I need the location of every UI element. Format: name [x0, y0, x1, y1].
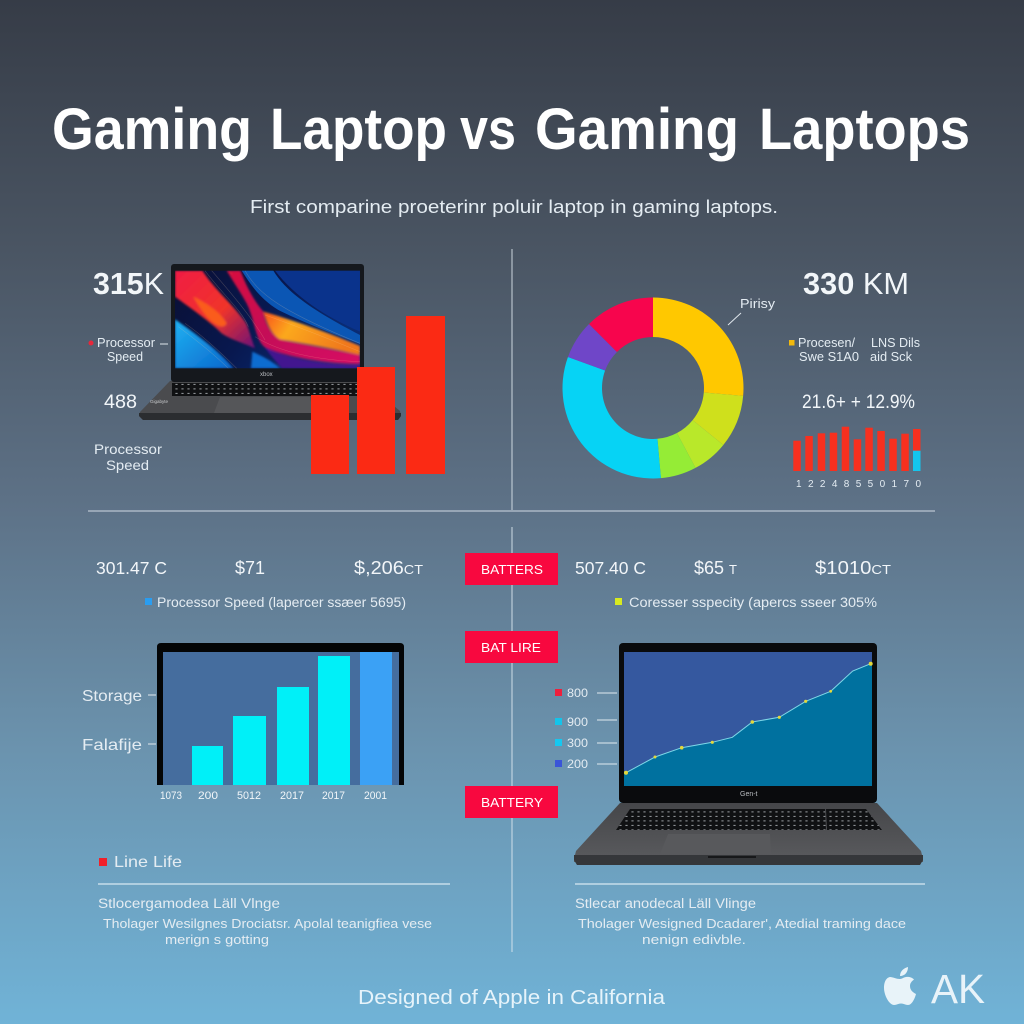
mini bar axis labels: 1 2 2 4 8 5 5 0 1 7 0: [796, 479, 921, 490]
label: processor speed: [94, 441, 162, 473]
stat row: $1010 CT: [815, 558, 891, 578]
title: Gaming: [52, 97, 252, 162]
description text: Tholager Wesilgnes Drociatsr. Apolal teanigfiea vese: [103, 917, 432, 931]
laptop illustration: Gigabyte: [150, 399, 169, 404]
chart axis labels: storage and falafije: Falafije: [82, 737, 142, 754]
legend: line life: Line Life: [114, 854, 182, 871]
panel: top right donut stats: [563, 266, 921, 490]
chart x axis years: 2001: [364, 790, 387, 802]
chart y axis legend: 900: [567, 717, 588, 729]
description text: Tholager Wesigned Dcadarer', Atedial traming dace: [578, 917, 906, 931]
laptop screen bar chart: [157, 643, 404, 785]
chart y axis legend: 300: [567, 738, 588, 750]
upper right blue region: [275, 271, 360, 332]
legend text: [789, 336, 920, 364]
description text: Stlecar anodecal Läll Vlinge: [575, 896, 756, 911]
laptop with area chart: Gen-t: [740, 791, 758, 798]
donut chart: [563, 298, 743, 478]
legend text: Swe S1A0: [799, 350, 859, 364]
chart x axis years: 5012: [237, 790, 261, 802]
stat: 330 KM: 330 KM: [803, 266, 909, 301]
stat row: [575, 558, 891, 578]
area chart: [624, 662, 873, 786]
label: processor speed: Processor: [94, 441, 162, 457]
title: [52, 97, 970, 162]
panel: bottom right stats: [555, 558, 925, 947]
mini bar chart: [793, 427, 920, 471]
title: vs: [460, 97, 516, 162]
badge: batters: [465, 553, 558, 585]
description text: [98, 896, 432, 947]
stat row: 301.47 C: [96, 558, 167, 578]
chart axis labels: storage and falafije: [82, 688, 156, 754]
description text: nenign edivble.: [642, 933, 746, 947]
label: processor speed with red dot: Speed: [107, 350, 143, 364]
left swath: [175, 271, 360, 368]
center swath: [227, 271, 360, 364]
stat: percent: 21.6+ + 12.9%: [802, 391, 915, 413]
label: processor speed: Speed: [106, 457, 149, 473]
donut callout: Pirisy: [740, 297, 776, 311]
stat: 488: 488: [104, 392, 137, 413]
badge: batters: BATTERS: [481, 562, 543, 577]
laptop with area chart: [574, 643, 923, 865]
description text: merign s gotting: [165, 933, 269, 947]
subtitle: First comparine proeterinr poluir laptop in gaming laptops.: [250, 196, 778, 217]
legend: core capacity: Coresser sspecity (apercs sseer 305%: [629, 595, 877, 610]
panel: bottom left stats: [82, 558, 450, 947]
chart x axis years: [160, 790, 387, 802]
donut callout: [728, 297, 776, 325]
legend: processor speed: Processor Speed (lapercer ssæer 5695): [157, 595, 406, 610]
chart axis labels: storage and falafije: Storage: [82, 688, 142, 705]
badge: battery: [465, 786, 558, 818]
panel: top left laptop stats: [88, 264, 445, 474]
chart y axis legend: [555, 688, 617, 771]
badges: red labels: [465, 553, 558, 818]
label: processor speed with red dot: Processor: [97, 336, 155, 350]
icon: apple logo: [884, 967, 916, 1005]
badge: battery: BATTERY: [481, 795, 543, 810]
chart y axis legend: 200: [567, 759, 588, 771]
chart x axis years: 2017: [322, 790, 345, 802]
description text: [575, 896, 906, 947]
stat row: $71: [235, 558, 265, 578]
chart x axis years: 1073: [160, 790, 182, 802]
stat: 315K: 315K: [93, 266, 164, 301]
laptop screen artwork: [175, 271, 360, 368]
title: Laptops: [759, 97, 970, 162]
legend text: aid Sck: [870, 350, 913, 364]
title: Gaming: [535, 97, 739, 162]
brand initials: AK: [931, 966, 985, 1012]
stat row: $,206 CT: [354, 558, 423, 578]
bar chart: red bars: [311, 316, 445, 474]
stat row: 507.40 C: [575, 558, 646, 578]
chart y axis legend: 800: [567, 688, 588, 700]
label: processor speed with red dot: [88, 336, 168, 364]
title: Laptop: [270, 97, 447, 162]
laptop illustration: xbox: [260, 372, 273, 378]
stat row: [96, 558, 423, 578]
badge: bat lire: BAT LIRE: [481, 640, 541, 655]
chart x axis years: 200: [198, 790, 218, 802]
laptop illustration: [139, 264, 401, 420]
stat row: $65 T: [694, 558, 737, 578]
chart x axis years: 2017: [280, 790, 304, 802]
legend text: LNS Dils: [871, 336, 920, 350]
badge: bat lire: [465, 631, 558, 663]
legend text: Procesen/: [798, 336, 856, 350]
description text: Stlocergamodea Läll Vlnge: [98, 896, 280, 911]
footer text: Designed of Apple in California: [358, 987, 666, 1009]
